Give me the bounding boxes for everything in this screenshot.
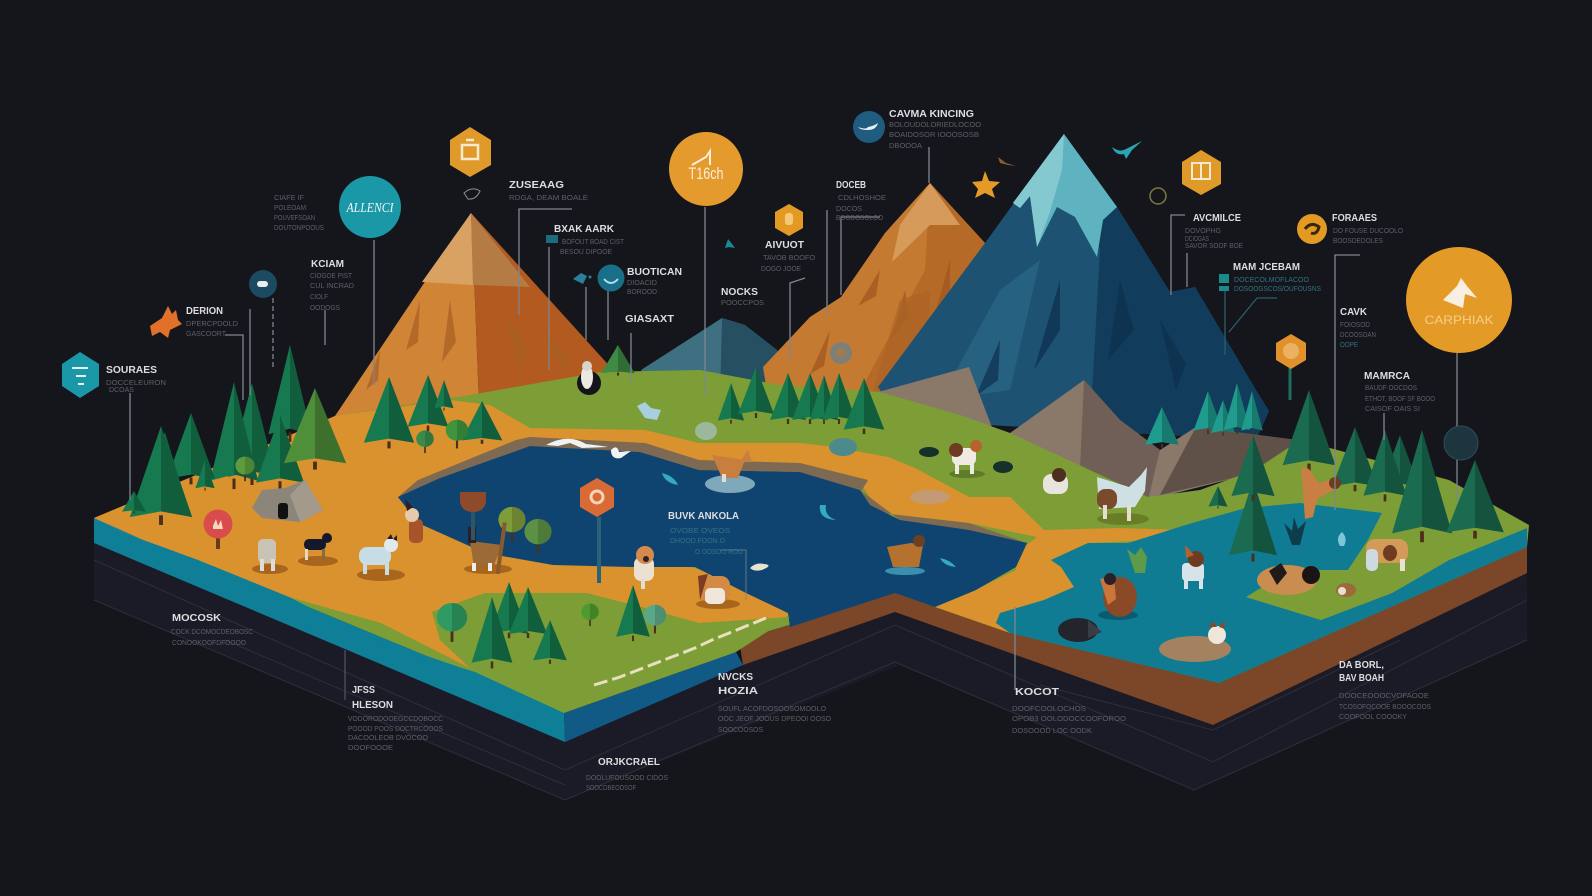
label: nocks: NOCKS [721, 287, 758, 298]
label: da borl: DOOCEOOOCVOFAOOE [1339, 691, 1429, 700]
label: foraaes: FORAAES [1332, 213, 1377, 224]
icon: outline fish [464, 189, 480, 199]
label: sources: SOURAES [106, 365, 157, 376]
label: cavma kincing: CAVMA KINCING [889, 109, 974, 120]
side: teal front-left [94, 518, 565, 742]
label: cavk [1340, 307, 1376, 349]
label: da borl: TCOSOFOCOOE BOOOCOOS [1339, 702, 1431, 711]
mountain: gray foothills [878, 367, 1297, 500]
label: buvk ankola: DHOOD FOON O [670, 536, 725, 545]
trees: lakeshore [496, 507, 552, 574]
small shore details [637, 402, 1013, 504]
lagoon: teal east [996, 503, 1527, 683]
animal: white goat meadow [1043, 468, 1068, 494]
label: mocosk: COCK DCOMOCDEOBOSC [171, 627, 253, 636]
label: derion: DPERCPDOLD [186, 319, 239, 328]
animal: black white penguin [577, 361, 601, 395]
label: bxak aark [546, 224, 624, 256]
text block: upper left note: POLEOAM [274, 203, 306, 212]
label: aivuot: DOGO JOOE [761, 264, 801, 273]
label: buotican [627, 267, 682, 296]
side: brown cliff [739, 547, 1527, 725]
label: kocot: DOSOOOD LOC OODK [1012, 726, 1092, 735]
label: doceb [836, 180, 886, 222]
label: cavk: CAVK [1340, 307, 1368, 318]
label: hleson [348, 685, 444, 752]
icon: brown bird [998, 157, 1016, 166]
animal: white fowl on lake [546, 439, 631, 458]
label: hleson: DOOFOOOE [348, 743, 393, 752]
label: bxak aark: BOFOUT BOAD CIST [562, 237, 624, 246]
label: aivuot: AIVUOT [765, 240, 804, 251]
animal: large white brown wolf [1097, 467, 1149, 525]
snow cap [1013, 134, 1117, 257]
label: kciam [310, 259, 355, 312]
trees: west forest [122, 345, 346, 525]
marker: red sign [204, 510, 232, 549]
label: buotican: DIOACID [627, 278, 658, 287]
label: mamrca [1364, 371, 1435, 413]
label: avcmilce: DOVOPHG [1185, 226, 1221, 235]
badge: orange circle house [669, 132, 743, 206]
label: kocot: DOOFCOOLOCHOS [1012, 704, 1086, 713]
label: da borl: COOFOOL COOOKY [1339, 712, 1407, 721]
animal: dark beaver [1058, 618, 1102, 642]
trees: small teal on foothill [1145, 383, 1263, 448]
lake: deep blue [398, 446, 1027, 627]
text block: upper left note: POUVEFSOAN [274, 213, 315, 222]
label: buvk ankola: OVOBE OVEOS [670, 526, 730, 535]
ground: teal strip west [94, 518, 564, 713]
icon: small dark circle [249, 270, 277, 298]
side: deep blue front [564, 652, 743, 742]
animal: small critter [1336, 583, 1356, 597]
icon: teal hexagon [62, 352, 99, 398]
animal: fox in lagoon [1182, 545, 1204, 589]
label: doceb: CDLHOSHOE [838, 193, 886, 202]
label: kocot: OPOB3 OOLODOCCOOFOROO [1012, 714, 1126, 723]
leader lines [130, 147, 1457, 700]
label: hozia: SOOCOOSOS [718, 725, 763, 734]
label: doceb: BOODOBOLOO [836, 213, 883, 222]
animal: deer with tree sign [464, 527, 512, 574]
label: mam jcebam: DOSOOGSCOS/OUFOUSNS [1234, 284, 1321, 293]
island side faces [94, 518, 1527, 742]
label: zuseaag: ZUSEAAG [509, 180, 564, 191]
trees: east forest [1208, 390, 1504, 562]
label: doceb: DOCEB [836, 180, 866, 191]
label: foraaes [1332, 213, 1403, 245]
label: buotican: BUOTICAN [627, 267, 682, 278]
label: avcmilce: DCIOGAS [1185, 234, 1209, 243]
label: hozia: SOUFL ACOFDOSOOSOMOOLO [718, 704, 826, 713]
label: mamrca: ETHOT, BOOF SF BOOO [1365, 394, 1435, 403]
ground: orange west plain [94, 400, 915, 668]
label: nocks [721, 287, 764, 307]
animal: fox [405, 499, 423, 543]
label: mamrca: CAISOF OAIS SI [1365, 404, 1420, 413]
label: foraaes: DO FOUSE DUCOOLO [1333, 226, 1403, 235]
mountain: right orange [763, 183, 985, 410]
icon: orange star [972, 171, 1000, 198]
meadow: green east patch [1246, 500, 1529, 620]
label: avcmilce: SAVOR SOOF BOE [1185, 241, 1243, 250]
label: hozia: NVCKS [718, 672, 753, 683]
label: derion: GASCOORT [186, 329, 226, 338]
label: orjkcrael: DOOLUFOUSOOD CIDOS [586, 773, 668, 782]
label: mam jcebam: DOCECOLMOFLACOO [1234, 275, 1309, 284]
label: orjkcrael [586, 757, 668, 792]
icon: outline circle [1150, 188, 1166, 204]
animal: brown dog wading [885, 535, 925, 575]
marker: orange lake hexagon [580, 478, 614, 517]
label: hleson: HLESON [352, 700, 393, 711]
meadow: green south [432, 593, 790, 713]
label: derion: DERION [186, 306, 223, 317]
label: foraaes: BOOSDEDOLES [1333, 236, 1383, 245]
label: hozia [718, 672, 831, 734]
label: kocot [1012, 687, 1126, 735]
label: hleson: JFSS [352, 685, 375, 696]
marker: brown mushroom tree [460, 492, 486, 540]
label: da borl: DA BORL, [1339, 660, 1384, 671]
mountain: distant blue-gray [641, 318, 800, 400]
icon: orange hexagon box [450, 127, 491, 177]
label: cavk: FOIOSOD [1340, 320, 1370, 329]
icon: faint circle [1444, 426, 1478, 460]
animal: fox on ice floe [705, 450, 755, 493]
label: buvk ankola [668, 511, 743, 556]
animal: calico dog [1366, 539, 1408, 571]
animal: tan resting dog [1159, 621, 1231, 662]
label: orjkcrael: ORJKCRAEL [598, 757, 660, 768]
icon: dark blue circle [853, 111, 885, 143]
label: avcmilce: AVCMILCE [1193, 213, 1241, 224]
fish in lake [662, 473, 956, 571]
animal: tan lying beast [1257, 563, 1320, 595]
label: mamrca: MAMRCA [1364, 371, 1410, 382]
animal: orange white dog [696, 574, 740, 609]
label: cavma kincing: DBOOOA [889, 141, 922, 150]
label: buvk ankola: BUVK ANKOLA [668, 511, 739, 522]
label: mocosk [171, 613, 253, 647]
text block: upper left note: DOUTONPOOUS [274, 223, 324, 232]
trees: south meadow [437, 582, 666, 668]
label: mocosk: MOCOSK [172, 613, 222, 624]
cave [252, 480, 323, 522]
text block: upper left note [274, 193, 324, 232]
icon: patterned hexagon [1276, 334, 1306, 369]
animal: cream dog [634, 546, 654, 589]
label: kciam: CUL INCRAD [310, 281, 355, 290]
ground: green base [94, 370, 1529, 713]
badge: teal circle [339, 176, 401, 238]
label: bxak aark: BXAK AARK [554, 224, 615, 235]
label: kocot: KOCOT [1015, 687, 1059, 698]
label: kciam: KCIAM [311, 259, 344, 270]
underside strata [94, 543, 1527, 800]
icon: orange circle [1297, 214, 1327, 244]
label: mam jcebam: MAM JCEBAM [1233, 262, 1300, 273]
animal: black dog [298, 533, 338, 566]
icon: gray target [830, 342, 852, 364]
label: cavk: OOPE [1340, 340, 1358, 349]
label: giasaxt: GIASAXT [625, 314, 674, 325]
label: sources [106, 365, 166, 394]
label: cavk: DCOOSOAN [1340, 330, 1376, 339]
label: cavma kincing: BOAIDOSOR IOOOSOSB [889, 130, 979, 139]
trees: foot of left pyramid [364, 375, 502, 453]
trail arrow [594, 618, 766, 685]
badge: big orange circle [1406, 247, 1512, 353]
badge: big orange circle: CARPHIAK [1424, 313, 1494, 327]
icon: teal birds [573, 239, 735, 284]
lake rim [398, 437, 1027, 567]
icon: small orange hexagon [775, 204, 803, 236]
badge: orange circle house: T16ch [688, 164, 724, 183]
icon: orange splash [150, 306, 182, 338]
animal: white wolf [357, 534, 405, 581]
icon: teal bird [1112, 141, 1142, 159]
trees: north shore [601, 345, 884, 434]
label: hozia: HOZIA [718, 686, 758, 697]
icon: teal smile circle [598, 264, 624, 292]
label: mocosk: CONOOKOOFDFOOOO [172, 638, 246, 647]
plants around lagoon [1127, 517, 1346, 573]
label: buvk ankola: O OOSOO ROO [695, 547, 743, 556]
label: da borl: BAV BOAH [1339, 673, 1384, 684]
label: aivuot: TAVOB BOOFO [763, 253, 815, 262]
label: kciam: CIOLF [310, 292, 328, 301]
badge: teal circle: ALLENCI [346, 201, 395, 216]
mountain: left orange pyramid [335, 213, 614, 430]
label: hleson: DACOOLEOB DVOCOO [348, 733, 428, 742]
label: da borl [1339, 660, 1431, 721]
animal: white brown dog meadow [949, 440, 985, 478]
label: nocks: POOCCPOS [721, 298, 764, 307]
label: avcmilce [1185, 213, 1243, 250]
label: hleson: POOOD POOS DOCTRCOOOS [348, 724, 443, 733]
label: bxak aark: BESOU DIPOOE [560, 247, 612, 256]
label: hleson: VODORODOOEGCCDOBOCC [348, 714, 444, 723]
label: doceb: DOCOS [836, 204, 862, 213]
label: aivuot [761, 240, 815, 273]
text block: upper left note: CIAFE IF [274, 193, 304, 202]
label: sources: DOCCELEURON [106, 378, 166, 387]
icon: orange hexagon book [1182, 150, 1221, 195]
label: kciam: OODOGS [310, 303, 340, 312]
label: cavma kincing: BOLOUDOLORIEDLOCOO [889, 120, 981, 129]
label: hozia: OOC JEOF JOOUS DPEOOI OOSO [718, 714, 831, 723]
label: zuseaag: RDGA, DEAM BOALE [509, 193, 588, 202]
label: zuseaag [509, 180, 588, 202]
label: sources: DCOAS [109, 385, 134, 394]
mountain: big blue peak [878, 134, 1269, 440]
ground: orange shore north-east [858, 468, 1192, 633]
label: mam jcebam [1219, 262, 1321, 293]
label: cavma kincing [889, 109, 981, 150]
label: kciam: CIOGOE PIST [310, 271, 352, 280]
label: buotican: BOROOD [627, 287, 658, 296]
animal: brown standing dog [1301, 467, 1341, 519]
animal: brown fox back [1098, 573, 1138, 620]
label: mamrca: BAUDF OOCDOS [1365, 383, 1417, 392]
label: orjkcrael: SOOCOBEOOSOF [586, 783, 636, 792]
animal: goat [252, 539, 288, 574]
label: derion [186, 306, 239, 338]
